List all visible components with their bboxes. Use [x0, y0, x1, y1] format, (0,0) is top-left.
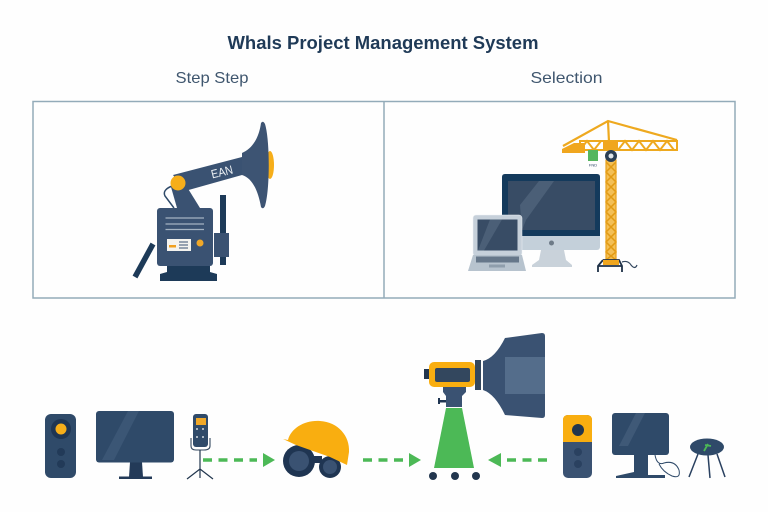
lens ring: [475, 360, 481, 390]
illustration: desktop monitor: [502, 174, 600, 267]
base: [160, 266, 217, 281]
card: [167, 239, 191, 251]
icon: side table: [689, 438, 725, 478]
cab: [605, 150, 617, 162]
illustration: tower crane: [562, 121, 677, 272]
icon: speaker left: [45, 414, 76, 478]
illustration: laptop: [468, 215, 526, 271]
cables: [563, 121, 677, 146]
body: [157, 208, 213, 266]
illustration: pump machine: [135, 122, 274, 281]
screen: [478, 220, 518, 250]
icon: monitor left: [96, 411, 174, 479]
screen: [508, 181, 595, 230]
stand: [532, 250, 572, 267]
side column: [220, 195, 226, 233]
rear cable: [164, 186, 174, 208]
title: Whals Project Management System: [228, 33, 538, 53]
status light: [196, 240, 204, 246]
lower link: [171, 187, 200, 208]
glare: [478, 220, 502, 250]
vent lines: [166, 218, 204, 230]
arrow: microphone to helmet: [203, 453, 275, 467]
wheels: [429, 472, 480, 480]
lens hood: [483, 338, 505, 415]
mast: [606, 160, 616, 260]
lid: [473, 215, 522, 256]
arm label: EAN: [210, 163, 234, 181]
pivot: [170, 176, 186, 190]
icon: camera on tripod: [424, 333, 545, 480]
icon: microphone: [187, 414, 213, 479]
logo: [549, 240, 554, 246]
mount: [443, 387, 466, 407]
screen glare: [520, 181, 554, 230]
horn: [242, 122, 269, 208]
camera body: [429, 362, 475, 387]
hanging load: [588, 150, 598, 161]
bezel: [502, 174, 600, 236]
foot: [598, 260, 622, 272]
tail cable: [622, 261, 637, 268]
leg: [135, 244, 153, 277]
arrow: helmet to camera: [363, 453, 421, 467]
keyboard: [476, 256, 519, 262]
icon: hard hat on wheels: [283, 421, 349, 478]
horn glow: [266, 151, 274, 179]
counterweight: [562, 143, 585, 153]
load label: FND: [589, 162, 597, 168]
camera back knob: [424, 369, 429, 379]
heading: left panel: Step Step: [176, 70, 249, 87]
hub: [603, 141, 618, 149]
base: [468, 255, 526, 271]
icon: speaker right: [563, 415, 592, 478]
heading: right panel: Selection: [530, 70, 602, 87]
icon: monitor right: [612, 413, 679, 478]
arm: [173, 157, 242, 191]
chassis: [502, 174, 600, 250]
arrow: speaker to camera: [488, 453, 548, 467]
panel frame: [33, 102, 735, 298]
jib truss: [580, 141, 677, 150]
green stand: [434, 408, 474, 468]
